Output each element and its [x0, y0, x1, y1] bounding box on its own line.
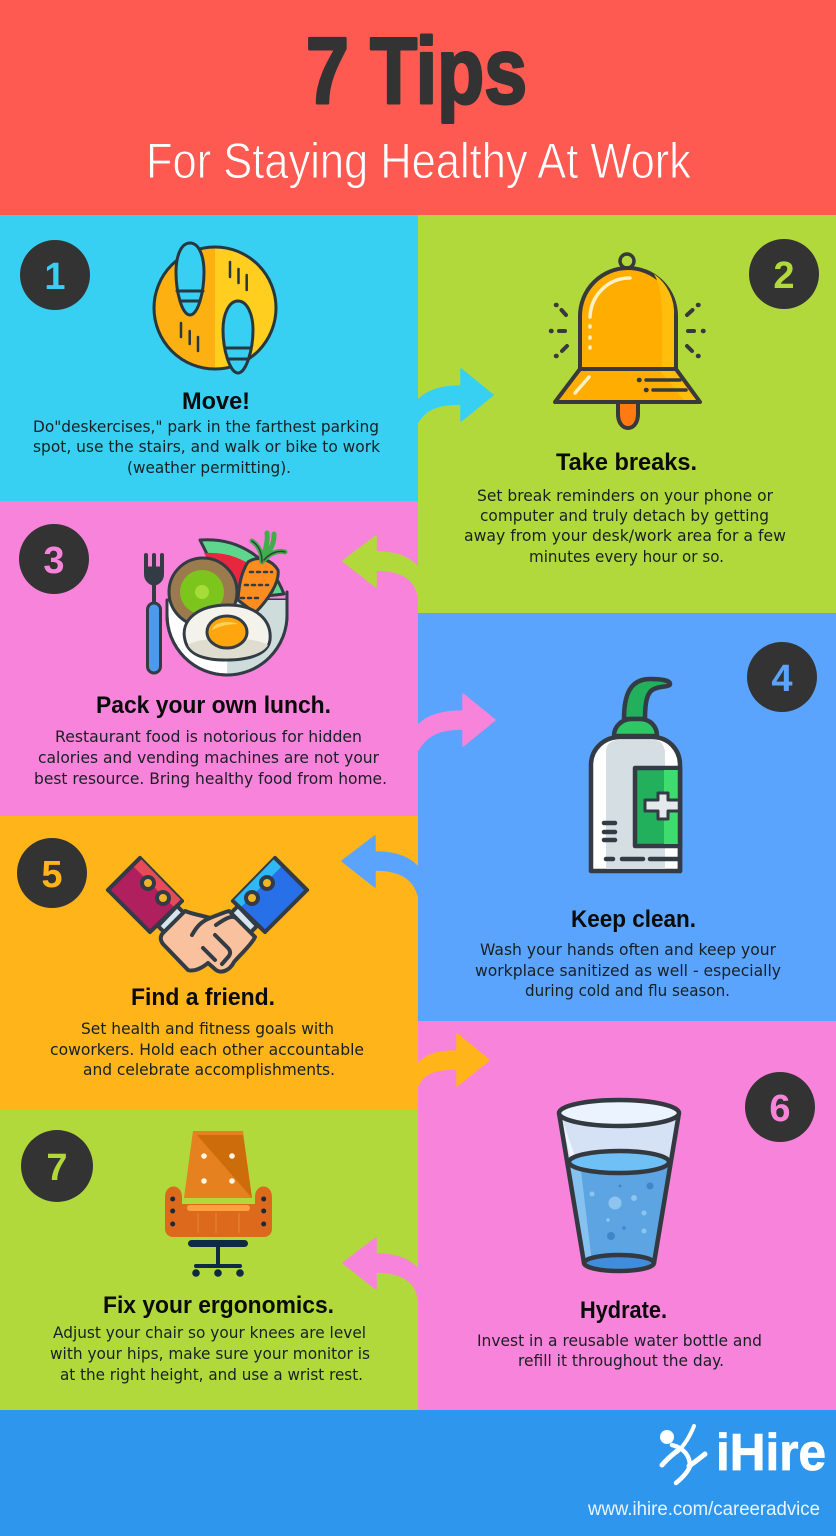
text block: minutes every hour or so. [529, 547, 724, 566]
panel: tip 3 background [0, 501, 418, 816]
heading: Pack your own lunch. [96, 692, 331, 719]
number badge 7: 7 [46, 1147, 68, 1189]
text block: spot, use the stairs, and walk or bike to work [33, 437, 381, 456]
number badge 5: 5 [41, 854, 63, 896]
number badge 4 [747, 642, 817, 712]
text block: away from your desk/work area for a few [464, 526, 786, 545]
text block: Adjust your chair so your knees are level [53, 1323, 366, 1342]
subtitle: For Staying Healthy At Work [146, 133, 692, 189]
text block [475, 940, 781, 1000]
text block [50, 1323, 370, 1384]
number badge 2: 2 [773, 255, 795, 297]
title: 7 Tips [306, 18, 527, 123]
text block: calories and vending machines are not your [38, 748, 379, 767]
text block [34, 727, 387, 788]
arrow: tip 4 to tip 5 [342, 836, 418, 895]
text block [477, 1331, 762, 1370]
heading: Find a friend. [131, 984, 275, 1011]
text block: Set health and fitness goals with [81, 1019, 334, 1038]
text block: Set break reminders on your phone or [477, 486, 773, 505]
icon: glass of water [559, 1100, 679, 1271]
text block: coworkers. Hold each other accountable [50, 1040, 364, 1059]
arrow: tip 6 to tip 7 [343, 1238, 418, 1297]
number badge 6: 6 [769, 1088, 791, 1130]
panel: tip 4 keep clean [475, 642, 817, 1000]
number badge 3 [19, 524, 89, 594]
heading: Hydrate. [580, 1297, 667, 1324]
text block: Restaurant food is notorious for hidden [55, 727, 362, 746]
footer logo and link [587, 1424, 826, 1520]
icon: fork and plate of food [146, 533, 287, 675]
text block: at the right height, and use a wrist rest. [60, 1365, 363, 1384]
panel: tip 6 background [418, 1021, 836, 1410]
panel: tip 2 take breaks [464, 239, 819, 566]
panel: tip 7 fix your ergonomics [21, 1130, 370, 1384]
icon: sanitizer bottle [591, 679, 680, 871]
number badge 7 [21, 1130, 93, 1202]
text block: Wash your hands often and keep your [480, 940, 776, 959]
panel: tip 5 find a friend [17, 838, 364, 1079]
panel: tip 4 background [418, 613, 836, 1021]
wordmark: iHire [716, 1424, 826, 1482]
icon: footprints on circle [154, 243, 276, 373]
panel: tip 3 pack your own lunch [19, 524, 387, 788]
text block: during cold and flu season. [525, 981, 730, 1000]
arrow: tip 1 to tip 2 [418, 369, 493, 422]
panel: tip 7 background [0, 1110, 418, 1410]
text block: Invest in a reusable water bottle and [477, 1331, 762, 1350]
text block: computer and truly detach by getting [480, 506, 769, 525]
panel: tip 1 move [20, 240, 381, 477]
panel: footer background [0, 1410, 836, 1536]
number badge 3: 3 [43, 540, 65, 582]
icon: handshake [108, 858, 307, 972]
number badge 2 [749, 239, 819, 309]
panel: tip 5 background [0, 816, 418, 1110]
text block: refill it throughout the day. [518, 1351, 724, 1370]
text block [33, 417, 381, 477]
number badge 5 [17, 838, 87, 908]
panel: tip 6 hydrate [477, 1072, 815, 1370]
arrow: tip 5 to tip 6 [417, 1034, 489, 1087]
text block: and celebrate accomplishments. [83, 1060, 335, 1079]
icon: bell [551, 254, 704, 428]
text block: Do"deskercises," park in the farthest parking [33, 417, 379, 436]
number badge 1: 1 [44, 256, 66, 298]
text block [464, 486, 786, 566]
panel: tip 2 background [418, 215, 836, 613]
number badge 6 [745, 1072, 815, 1142]
text block [50, 1019, 364, 1079]
icon: iHire figure logo [660, 1426, 705, 1483]
arrow: tip 2 to tip 3 [343, 536, 418, 595]
arrow: tip 3 to tip 4 [418, 694, 495, 750]
panel: tip 1 background [0, 215, 418, 501]
heading: Keep clean. [571, 906, 696, 933]
text block: workplace sanitized as well - especially [475, 961, 781, 980]
number badge 1 [20, 240, 90, 310]
heading: Move! [182, 388, 250, 415]
header panel [0, 0, 836, 215]
heading: Fix your ergonomics. [103, 1292, 334, 1319]
website url: www.ihire.com/careeradvice [587, 1499, 820, 1520]
text block: with your hips, make sure your monitor is [50, 1344, 370, 1363]
number badge 4: 4 [771, 658, 793, 700]
text block: (weather permitting). [127, 458, 291, 477]
icon: office chair [165, 1131, 272, 1277]
heading: Take breaks. [556, 449, 697, 476]
text block: best resource. Bring healthy food from home. [34, 769, 387, 788]
